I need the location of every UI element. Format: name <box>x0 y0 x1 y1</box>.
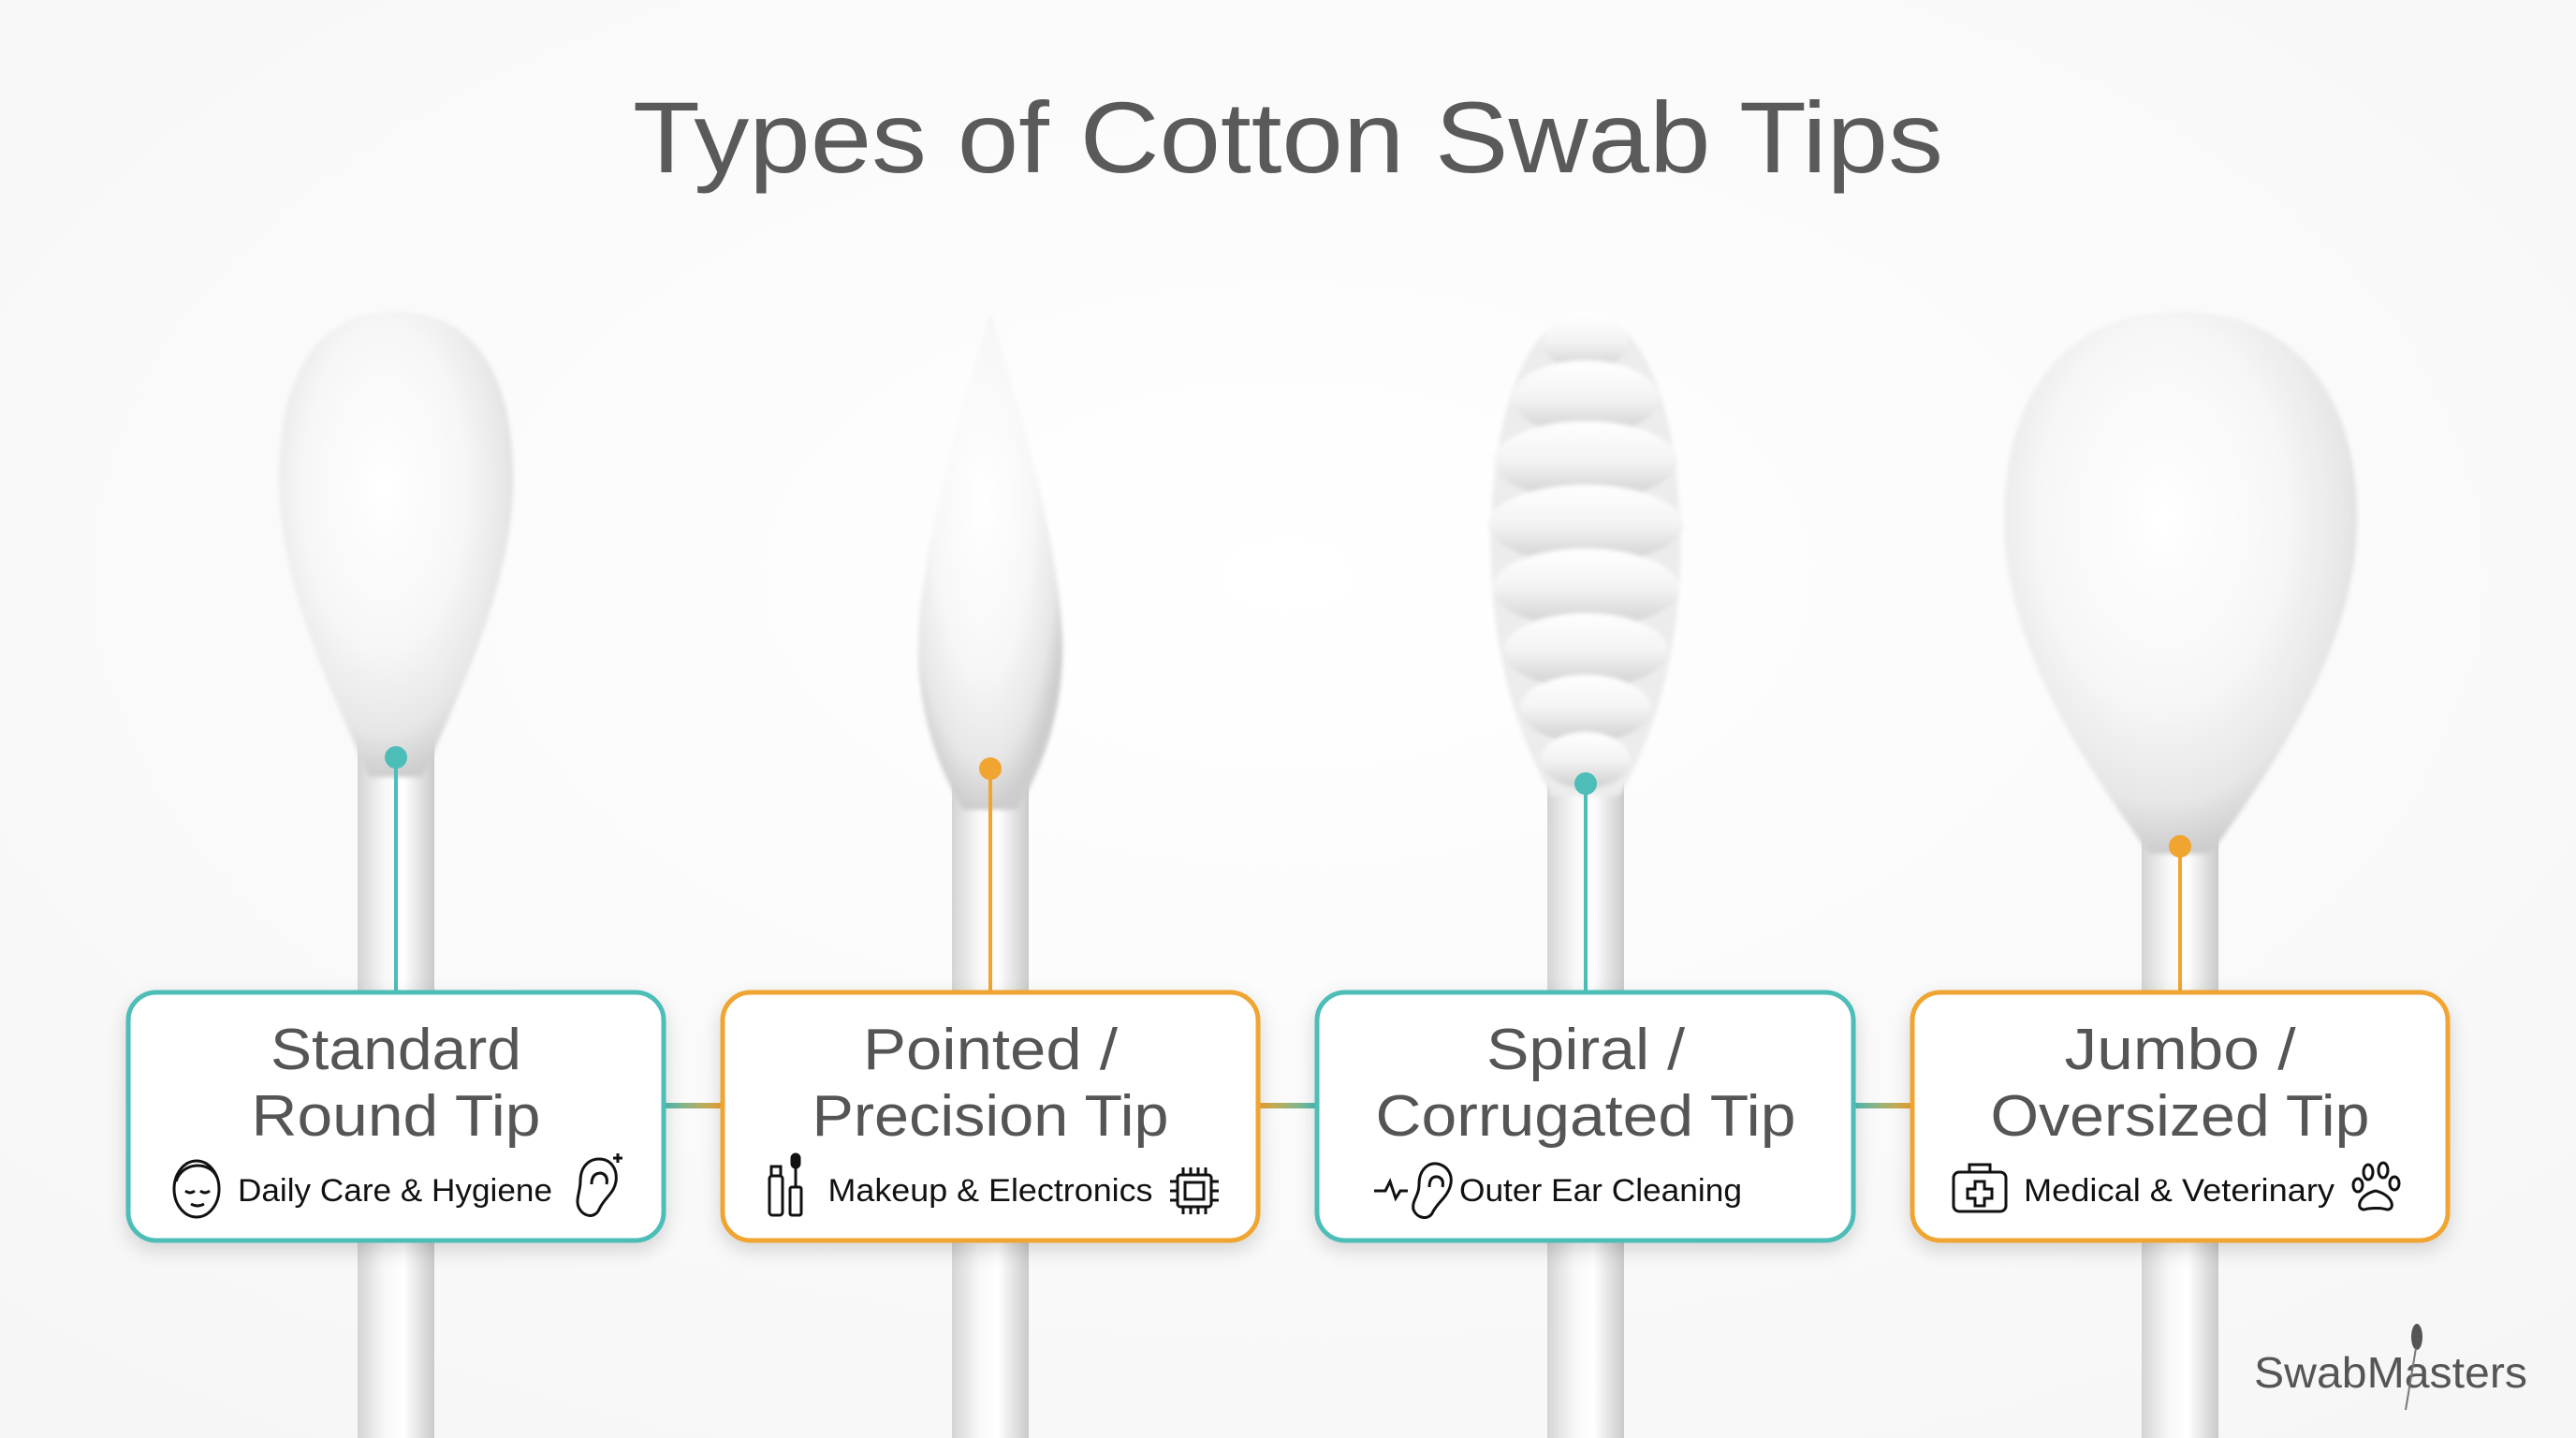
icon: mascara <box>769 1154 801 1215</box>
panel: standard round tip: Round Tip <box>251 1084 541 1149</box>
logo: SwabMasters <box>2254 1348 2527 1397</box>
icon: paw <box>2353 1163 2399 1210</box>
icon: ear with pulse <box>1374 1164 1451 1218</box>
connectors: dots and lines <box>385 746 2191 1108</box>
panel: pointed precision tip: Precision Tip <box>812 1084 1168 1149</box>
icon: ear <box>578 1153 622 1215</box>
panel: spiral corrugated tip: Spiral / <box>1486 1018 1686 1082</box>
title: Types of Cotton Swab Tips <box>633 81 1943 194</box>
panel: standard round tip <box>128 992 664 1240</box>
panel: spiral corrugated tip <box>1317 992 1853 1240</box>
icon: medical kit <box>1954 1165 2006 1211</box>
swab head: pointed <box>918 312 1062 810</box>
panel: jumbo oversized tip: Medical & Veterinary <box>2024 1173 2334 1209</box>
panel: standard round tip: Standard <box>271 1018 521 1082</box>
panel: jumbo oversized tip: Oversized Tip <box>1990 1084 2370 1149</box>
panel: pointed precision tip: Pointed / <box>863 1018 1119 1082</box>
panel: pointed precision tip: Makeup & Electronics <box>827 1173 1153 1209</box>
swab head: jumbo <box>2004 312 2357 854</box>
icon: chip <box>1170 1167 1219 1214</box>
swab head: standard round <box>279 312 513 777</box>
icon: face <box>174 1161 219 1217</box>
panel: standard round tip: Daily Care & Hygiene <box>238 1173 552 1209</box>
panel: spiral corrugated tip: Corrugated Tip <box>1376 1084 1795 1149</box>
panel: jumbo oversized tip <box>1912 992 2448 1240</box>
swab head: spiral <box>1488 312 1683 796</box>
sticks <box>358 730 2218 1438</box>
panel: jumbo oversized tip: Jumbo / <box>2065 1018 2296 1082</box>
panel: pointed precision tip <box>723 992 1258 1240</box>
logo <box>2254 1324 2527 1410</box>
panel: spiral corrugated tip: Outer Ear Cleaning <box>1459 1173 1742 1209</box>
